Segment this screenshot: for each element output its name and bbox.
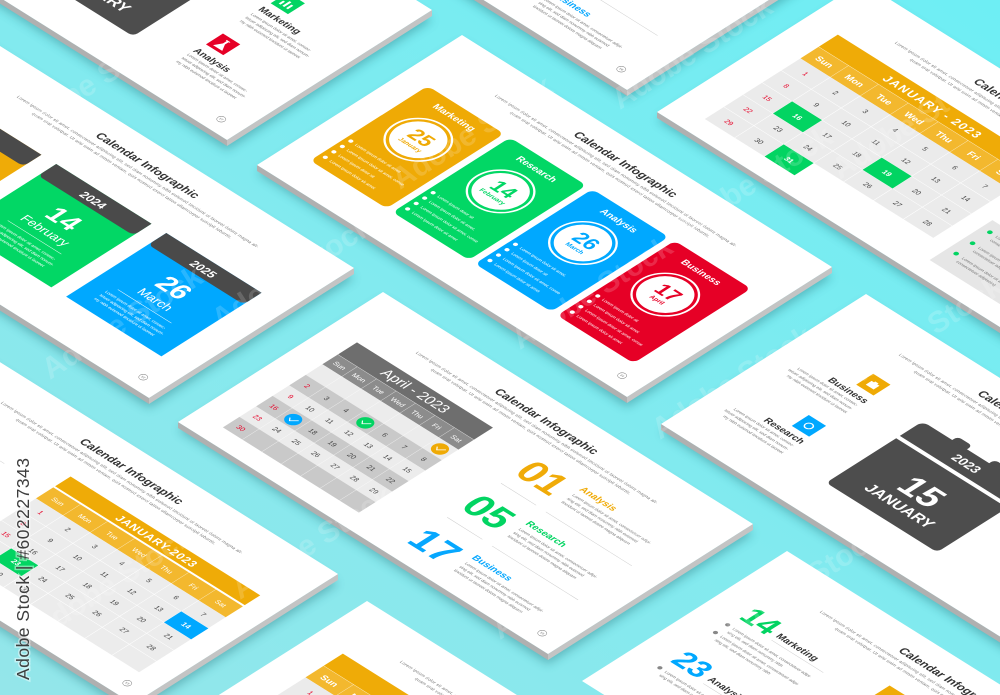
April slide content: 15 xyxy=(539,631,546,635)
calendar: April 2023: April - 2023 xyxy=(376,367,453,416)
bottom right slide content: 23 xyxy=(664,647,721,683)
bottom left slide content: 27 xyxy=(117,627,130,635)
card: Business: Lorem ipsum dolor sit amet xyxy=(592,303,642,334)
bottom left slide content: 23 xyxy=(9,558,23,567)
top left slide content: Lorem ipsum dolor sit amet, consec- xyxy=(186,53,250,93)
watermark pattern: Adobe Stock xyxy=(36,259,209,386)
right middle slide content: my nibh euismod tincidunt ut laoreet xyxy=(722,415,786,455)
left slide content: 2024 xyxy=(76,189,111,211)
top right slide content: 1 xyxy=(800,71,809,77)
centre slide content xyxy=(292,60,800,380)
top right slide content: 2 xyxy=(830,90,839,96)
top right slide content: 21 xyxy=(940,207,952,215)
bottom right slide content xyxy=(650,578,1000,695)
top right slide content: Tue xyxy=(873,93,895,106)
calendar: April 2023: 24 xyxy=(270,426,282,434)
left slide content: 26 xyxy=(148,271,200,304)
card: Research: Lorem ipsum dolor sit xyxy=(436,195,476,220)
top left slide content xyxy=(0,0,358,123)
slide: bottom middle, calendar xyxy=(162,601,737,695)
calendar: April 2023: 14 xyxy=(381,454,393,462)
card: Research: Lorem ipsum dolor sit amet xyxy=(411,211,460,242)
top right slide content: 29 xyxy=(722,119,735,127)
April slide content: Research xyxy=(522,520,569,549)
calendar: April 2023: 22 xyxy=(384,477,396,485)
bottom left slide content: Lorem ipsum dolor sit amet, consectetuer adipiscing elit, sed diam nonummy nibh euismod tincidunt ut laoreet dolore magna ali- xyxy=(0,401,245,555)
top right slide content: 5 xyxy=(920,146,929,152)
card: Business xyxy=(557,241,751,363)
bottom left slide content: 9 xyxy=(45,538,54,544)
right middle slide content: 15 xyxy=(888,471,955,513)
bottom left slide content: 4 xyxy=(117,561,126,567)
calendar: April 2023: 16 xyxy=(267,404,280,412)
bottom left slide content: 10 xyxy=(71,554,83,562)
right middle slide content: my nibh euismod tincidunt ut laoreet xyxy=(786,374,849,414)
bottom left slide content: JANUARY-2023 xyxy=(112,514,200,569)
card: Business: Business xyxy=(678,258,724,288)
left slide content: Lorem ipsum dolor sit amet, consec- xyxy=(104,290,168,330)
top right slide content: Thu xyxy=(932,130,956,144)
top right slide content: Wed xyxy=(902,110,927,126)
left slide content: 12 xyxy=(140,375,147,379)
bottom left slide content: 8 xyxy=(18,521,27,527)
right middle slide content: tetuer adipiscing elit, sed diam nonum- xyxy=(787,368,855,411)
calendar: April 2023: 27 xyxy=(328,463,341,471)
top middle slide content: tincidunt ut laoreet dolore magna aliquam xyxy=(532,4,604,50)
left slide content: tetuer adipiscing elit, sed diam nonum- xyxy=(98,293,166,336)
bottom left slide content: 14 xyxy=(179,621,194,631)
right middle slide content xyxy=(718,317,1000,593)
card: Marketing: Marketing xyxy=(429,103,478,133)
top right slide content: 12 xyxy=(899,158,912,166)
bottom left slide content: 16 xyxy=(26,548,39,556)
top left slide content: my nibh euismod tincidunt ut laoreet xyxy=(175,60,239,100)
slide: bottom right, numbered dates xyxy=(582,551,1000,695)
bottom left slide content: 3 xyxy=(90,544,99,550)
slide: left, date cards xyxy=(0,36,354,408)
calendar: April 2023: 11 xyxy=(323,418,335,425)
calendar: April 2023: 13 xyxy=(361,442,374,450)
left slide content: 2025 xyxy=(186,258,221,280)
left slide content: March xyxy=(134,286,177,313)
bottom left slide content: Calendar Infographic xyxy=(76,437,187,507)
card: Business: Lorem ipsum dolor sit xyxy=(601,298,641,323)
centre slide content: quam erat volutpat. Ut wisi enim ad minim veniam, quis nostrud exerci tation ullamcorper suscipit lobortis. xyxy=(508,111,712,238)
calendar: April 2023: Sun xyxy=(331,361,347,371)
April slide content: tincidunt ut laoreet dolore magna aliquam xyxy=(560,500,632,546)
top right slide content: 31 xyxy=(782,155,796,165)
April slide content: 01 xyxy=(505,455,578,501)
bottom right slide content: Lorem ipsum dolor sit amet, consectetuer adipi- xyxy=(731,627,813,679)
top left slide content: tetuer adipiscing elit, sed diam nonum- xyxy=(180,56,248,99)
bottom right slide content: Marketing xyxy=(773,632,821,663)
centre slide content: Calendar Infographic xyxy=(570,130,681,200)
right middle slide content: JANUARY xyxy=(860,482,939,531)
April slide content: Lorem ipsum dolor sit amet, consectetuer adipi- xyxy=(571,493,653,545)
slide: centre bottom, April calendar and numbers xyxy=(178,292,753,664)
bottom left slide content: 17 xyxy=(53,565,66,573)
calendar: April 2023: 26 xyxy=(309,451,321,459)
April slide content: Analysis xyxy=(576,486,620,513)
slide: bottom left, January calendar xyxy=(0,342,338,695)
watermark pattern: Adobe Stock xyxy=(506,229,679,356)
left slide content: quam erat volutpat. Ut wisi enim ad minim veniam, quis nostrud exerci tation ullamcorper suscipit lobortis. xyxy=(30,112,234,239)
card: Marketing: Lorem ipsum dolor sit amet, conse xyxy=(345,148,406,187)
calendar: April 2023: 2 xyxy=(302,384,311,390)
bottom left slide content: Wed xyxy=(129,547,148,559)
top right slide content: 27 xyxy=(891,201,903,208)
watermark pattern: Adobe Stock xyxy=(226,479,399,606)
card: Research: February xyxy=(477,188,507,206)
calendar: April 2023: Mon xyxy=(349,373,367,384)
watermark pattern: Adobe Stock xyxy=(716,519,889,646)
top right slide content: 15 xyxy=(760,95,773,103)
left slide content: Lorem ipsum dolor sit amet, consectetuer adipiscing elit, sed diam nonummy nibh euismod tincidunt ut laoreet dolore magna ali- xyxy=(16,95,261,249)
top right slide content: 22 xyxy=(741,107,754,115)
card: Analysis xyxy=(475,189,669,312)
April slide content: Lorem ipsum dolor sit amet, consectetuer adipi- xyxy=(517,527,600,579)
top right slide content: 4 xyxy=(890,128,899,134)
April slide content: Calendar Infographic xyxy=(491,387,602,457)
top right slide content: 16 xyxy=(790,112,805,122)
card: Marketing: January xyxy=(396,137,423,154)
top right slide content: 28 xyxy=(920,219,933,227)
right middle slide content: 2023 xyxy=(948,452,985,475)
top right slide content: 3 xyxy=(860,109,869,115)
card: Business: Lorem ipsum dolor sit amet xyxy=(575,314,625,345)
card: Analysis: Lorem ipsum dolor sit amet xyxy=(493,262,542,293)
bottom left slide content: 26 xyxy=(90,610,103,618)
top right slide content: 19 xyxy=(880,168,894,178)
top right slide content: 9 xyxy=(811,102,820,108)
April slide content: Lorem ipsum dolor sit amet, consectetuer adipiscing elit, sed diam nonummy nibh euismod tincidunt ut laoreet dolore magna ali- xyxy=(415,351,660,505)
April slide content: Lorem ipsum dolor sit amet, consectetuer adipi- xyxy=(463,562,546,613)
calendar: April 2023: 21 xyxy=(364,465,377,473)
card: Business: 17 xyxy=(649,281,687,305)
top right slide content: 7 xyxy=(980,184,989,190)
April slide content: tincidunt ut laoreet dolore magna aliquam xyxy=(453,568,525,614)
slide: centre, four coloured cards xyxy=(257,35,832,407)
slide: right middle, dark calendar with icons xyxy=(661,294,1000,666)
top middle slide content: sing elit, sed diam nonummy nibh euismod xyxy=(537,1,611,48)
left slide content: Calendar Infographic xyxy=(92,131,203,201)
card: Research: Lorem ipsum dolor sit amet, xyxy=(428,200,477,231)
bottom left slide content xyxy=(0,391,306,687)
left slide content xyxy=(0,64,322,381)
top right slide content: consectetuer adipiscing xyxy=(955,260,998,287)
right middle slide content: Business xyxy=(825,376,871,406)
calendar: April 2023: Tue xyxy=(370,385,386,396)
top middle slide content xyxy=(477,0,669,73)
slide: top right, January calendar xyxy=(657,0,1000,354)
card: Marketing xyxy=(310,86,504,208)
bottom left slide content: 28 xyxy=(144,644,157,652)
top right slide content: 17 xyxy=(820,132,833,140)
bottom left slide content: 5 xyxy=(144,578,153,584)
bottom left slide content: 11 xyxy=(98,571,110,579)
calendar: April 2023: Wed xyxy=(388,397,406,408)
calendar: April 2023: Fri xyxy=(429,423,443,431)
bottom left slide content: Thu xyxy=(158,565,174,575)
calendar: April 2023: 28 xyxy=(348,475,360,483)
top right slide content: 20 xyxy=(910,188,922,196)
calendar: April 2023: 7 xyxy=(399,445,408,451)
calendar: April 2023: 29 xyxy=(367,487,380,495)
right middle slide content: Lorem ipsum dolor sit amet, consec- xyxy=(796,367,860,407)
left slide content: my nibh euismod tincidunt ut laoreet xyxy=(93,297,157,337)
bottom left slide content: 25 xyxy=(63,593,76,601)
bottom left slide content: 13 xyxy=(152,605,164,613)
top left slide content: tetuer adipiscing elit, sed diam nonum- xyxy=(244,16,312,58)
bottom left slide content: 31 xyxy=(19,587,31,595)
calendar: April 2023: 20 xyxy=(345,452,357,460)
top right slide content xyxy=(705,11,1000,318)
bottom left slide content: Tue xyxy=(103,531,119,541)
watermark pattern: Adobe Stock xyxy=(486,519,659,646)
watermark pattern: Adobe Stock xyxy=(206,209,379,336)
card: Marketing: Lorem ipsum dolor sit amet xyxy=(328,159,378,190)
watermark pattern: Adobe Stock xyxy=(646,319,819,446)
slide: top left, dark calendar with icons xyxy=(0,0,432,150)
top left slide content: my nibh euismod tincidunt ut laoreet xyxy=(239,19,302,59)
bottom left slide content: 12 xyxy=(125,588,137,596)
centre slide content: Lorem ipsum dolor sit amet, consectetuer adipiscing elit, sed diam nonummy nibh euismod tincidunt ut laoreet dolore magna ali- xyxy=(494,94,739,248)
calendar: April 2023: 30 xyxy=(234,425,246,433)
card: Marketing: 25 xyxy=(402,126,440,150)
calendar: April 2023: 3 xyxy=(321,396,331,402)
top right slide content: 24 xyxy=(801,144,814,152)
bottom left slide content: 24 xyxy=(36,576,49,584)
bottom left slide content: 20 xyxy=(135,616,147,624)
bottom left slide content: 21 xyxy=(162,633,174,641)
card: Research: Lorem ipsum dolor sit amet, conse xyxy=(419,205,480,244)
April slide content: tincidunt ut laoreet dolore magna aliquam xyxy=(506,534,578,580)
top right slide content: 23 xyxy=(771,126,784,134)
card: Research: Research xyxy=(513,155,559,184)
bottom right slide content: 14 xyxy=(732,603,789,640)
right middle slide content: Lorem ipsum dolor sit amet, consec- xyxy=(732,407,796,448)
April slide content: sing elit, sed diam nonummy nibh euismod xyxy=(566,497,640,543)
top right slide content: 11 xyxy=(869,139,881,147)
calendar: April 2023: 23 xyxy=(250,414,263,422)
top right slide content: 8 xyxy=(781,84,790,89)
top right slide content: 10 xyxy=(839,120,852,128)
April slide content: 05 xyxy=(451,489,525,535)
bottom left slide content: 7 xyxy=(198,612,207,618)
bottom left slide content: Fri xyxy=(186,583,200,591)
calendar: April 2023: 15 xyxy=(400,466,413,474)
watermark pattern: Adobe Stock xyxy=(226,9,399,136)
card: Analysis: Lorem ipsum dolor sit amet, conse xyxy=(502,257,563,295)
left slide content: February xyxy=(17,213,74,249)
April slide content: Business xyxy=(469,554,515,583)
watermark pattern: Adobe Stock xyxy=(666,119,839,246)
calendar: April 2023: Sat xyxy=(448,435,463,444)
top right slide content: 18 xyxy=(850,151,863,159)
bottom left slide content: 18 xyxy=(80,582,93,590)
top right slide content: Fri xyxy=(964,150,983,162)
top right slide content: Sun xyxy=(813,55,836,70)
card: Marketing: Lorem ipsum dolor sit xyxy=(337,154,377,179)
bottom right slide content: Lorem ipsum dolor sit amet, consectetuer adipi- xyxy=(719,635,801,686)
calendar: April 2023: 12 xyxy=(342,430,355,438)
card: Marketing: Lorem ipsum dolor sit amet xyxy=(354,143,403,174)
calendar: April 2023 xyxy=(223,342,493,513)
bottom middle slide content: Sun xyxy=(318,674,341,689)
top left slide content: Marketing xyxy=(255,6,304,36)
bottom middle slide content xyxy=(229,638,644,695)
calendar: April 2023: 9 xyxy=(285,394,295,400)
card: Research xyxy=(393,138,586,260)
calendar: April 2023: Thu xyxy=(408,410,425,420)
centre slide content: 14 xyxy=(619,374,625,378)
right middle slide content: tetuer adipiscing elit, sed diam nonum- xyxy=(723,409,791,451)
bottom left slide content: 2 xyxy=(62,527,72,533)
watermark pattern: Adobe Stock xyxy=(6,19,179,146)
top left slide content: 17 xyxy=(218,117,225,121)
April slide content: 17 xyxy=(398,523,471,570)
bottom left slide content: Sat xyxy=(212,599,227,609)
top right slide content: 30 xyxy=(752,138,765,146)
top middle slide content: 16 xyxy=(618,67,625,71)
card: Analysis: 26 xyxy=(566,229,605,254)
right middle slide content: Research xyxy=(760,416,807,446)
calendar: April 2023: 18 xyxy=(306,428,319,436)
top right slide content: 14 xyxy=(959,195,971,203)
slide: top middle, numbered list xyxy=(257,0,832,100)
calendar: April 2023: 25 xyxy=(289,439,302,447)
card: Analysis: Analysis xyxy=(597,207,640,235)
left slide content: 14 xyxy=(38,202,90,235)
stock id caption: Adobe Stock | #602227343 xyxy=(13,458,33,680)
bottom left slide content: quam erat volutpat. Ut wisi enim ad minim veniam, quis nostrud exerci tation ullamcorper suscipit lobortis. xyxy=(14,418,218,545)
watermark pattern: Adobe Stock xyxy=(826,59,999,186)
top right slide content: 6 xyxy=(950,165,959,171)
April slide content xyxy=(215,319,721,637)
top left slide content: Lorem ipsum dolor sit amet, consec- xyxy=(249,12,314,53)
top left slide content: Analysis xyxy=(190,47,234,74)
April slide content: sing elit, sed diam nonummy nibh euismod xyxy=(458,565,532,612)
April slide content: quam erat volutpat. Ut wisi enim ad minim veniam, quis nostrud exerci tation ullamcorper suscipit lobortis. xyxy=(429,368,633,495)
top right slide content: 25 xyxy=(831,163,843,171)
card: Business: April xyxy=(647,294,666,306)
card: Research: 14 xyxy=(484,177,523,202)
April slide content: sing elit, sed diam nonummy nibh euismod xyxy=(512,531,586,578)
top right slide content: Mon xyxy=(842,73,867,89)
bottom right slide content: sing elit, sed diam nonummy nibh xyxy=(713,638,773,676)
bottom right slide content: sing elit, sed diam nonummy nibh xyxy=(726,630,785,668)
top right slide content: 26 xyxy=(861,182,873,190)
bottom left slide content: 1 xyxy=(35,510,44,516)
calendar: April 2023: 19 xyxy=(325,440,338,448)
watermark pattern: Adobe Stock xyxy=(386,69,559,196)
watermark pattern: Adobe Stock xyxy=(26,519,199,646)
top right slide content: JANUARY - 2023 xyxy=(879,73,985,140)
bottom left slide content: 19 xyxy=(107,599,120,607)
calendar: April 2023: 10 xyxy=(303,405,316,413)
card: Analysis: Lorem ipsum dolor sit amet, xyxy=(518,246,568,277)
bottom left slide content: Mon xyxy=(76,514,93,525)
bottom left slide content: 13 xyxy=(124,681,131,685)
calendar: April 2023: 8 xyxy=(418,457,428,463)
bottom left slide content: Sun xyxy=(49,497,65,507)
calendar: April 2023: 6 xyxy=(380,432,389,438)
card: Business: Lorem ipsum dolor sit amet, conse xyxy=(584,309,645,347)
top right slide content: 13 xyxy=(929,176,941,184)
card: Analysis: March xyxy=(563,242,585,256)
calendar: April 2023: 4 xyxy=(341,408,350,414)
card: Analysis: Lorem ipsum dolor sit xyxy=(510,252,550,277)
bottom left slide content: 6 xyxy=(171,595,180,601)
